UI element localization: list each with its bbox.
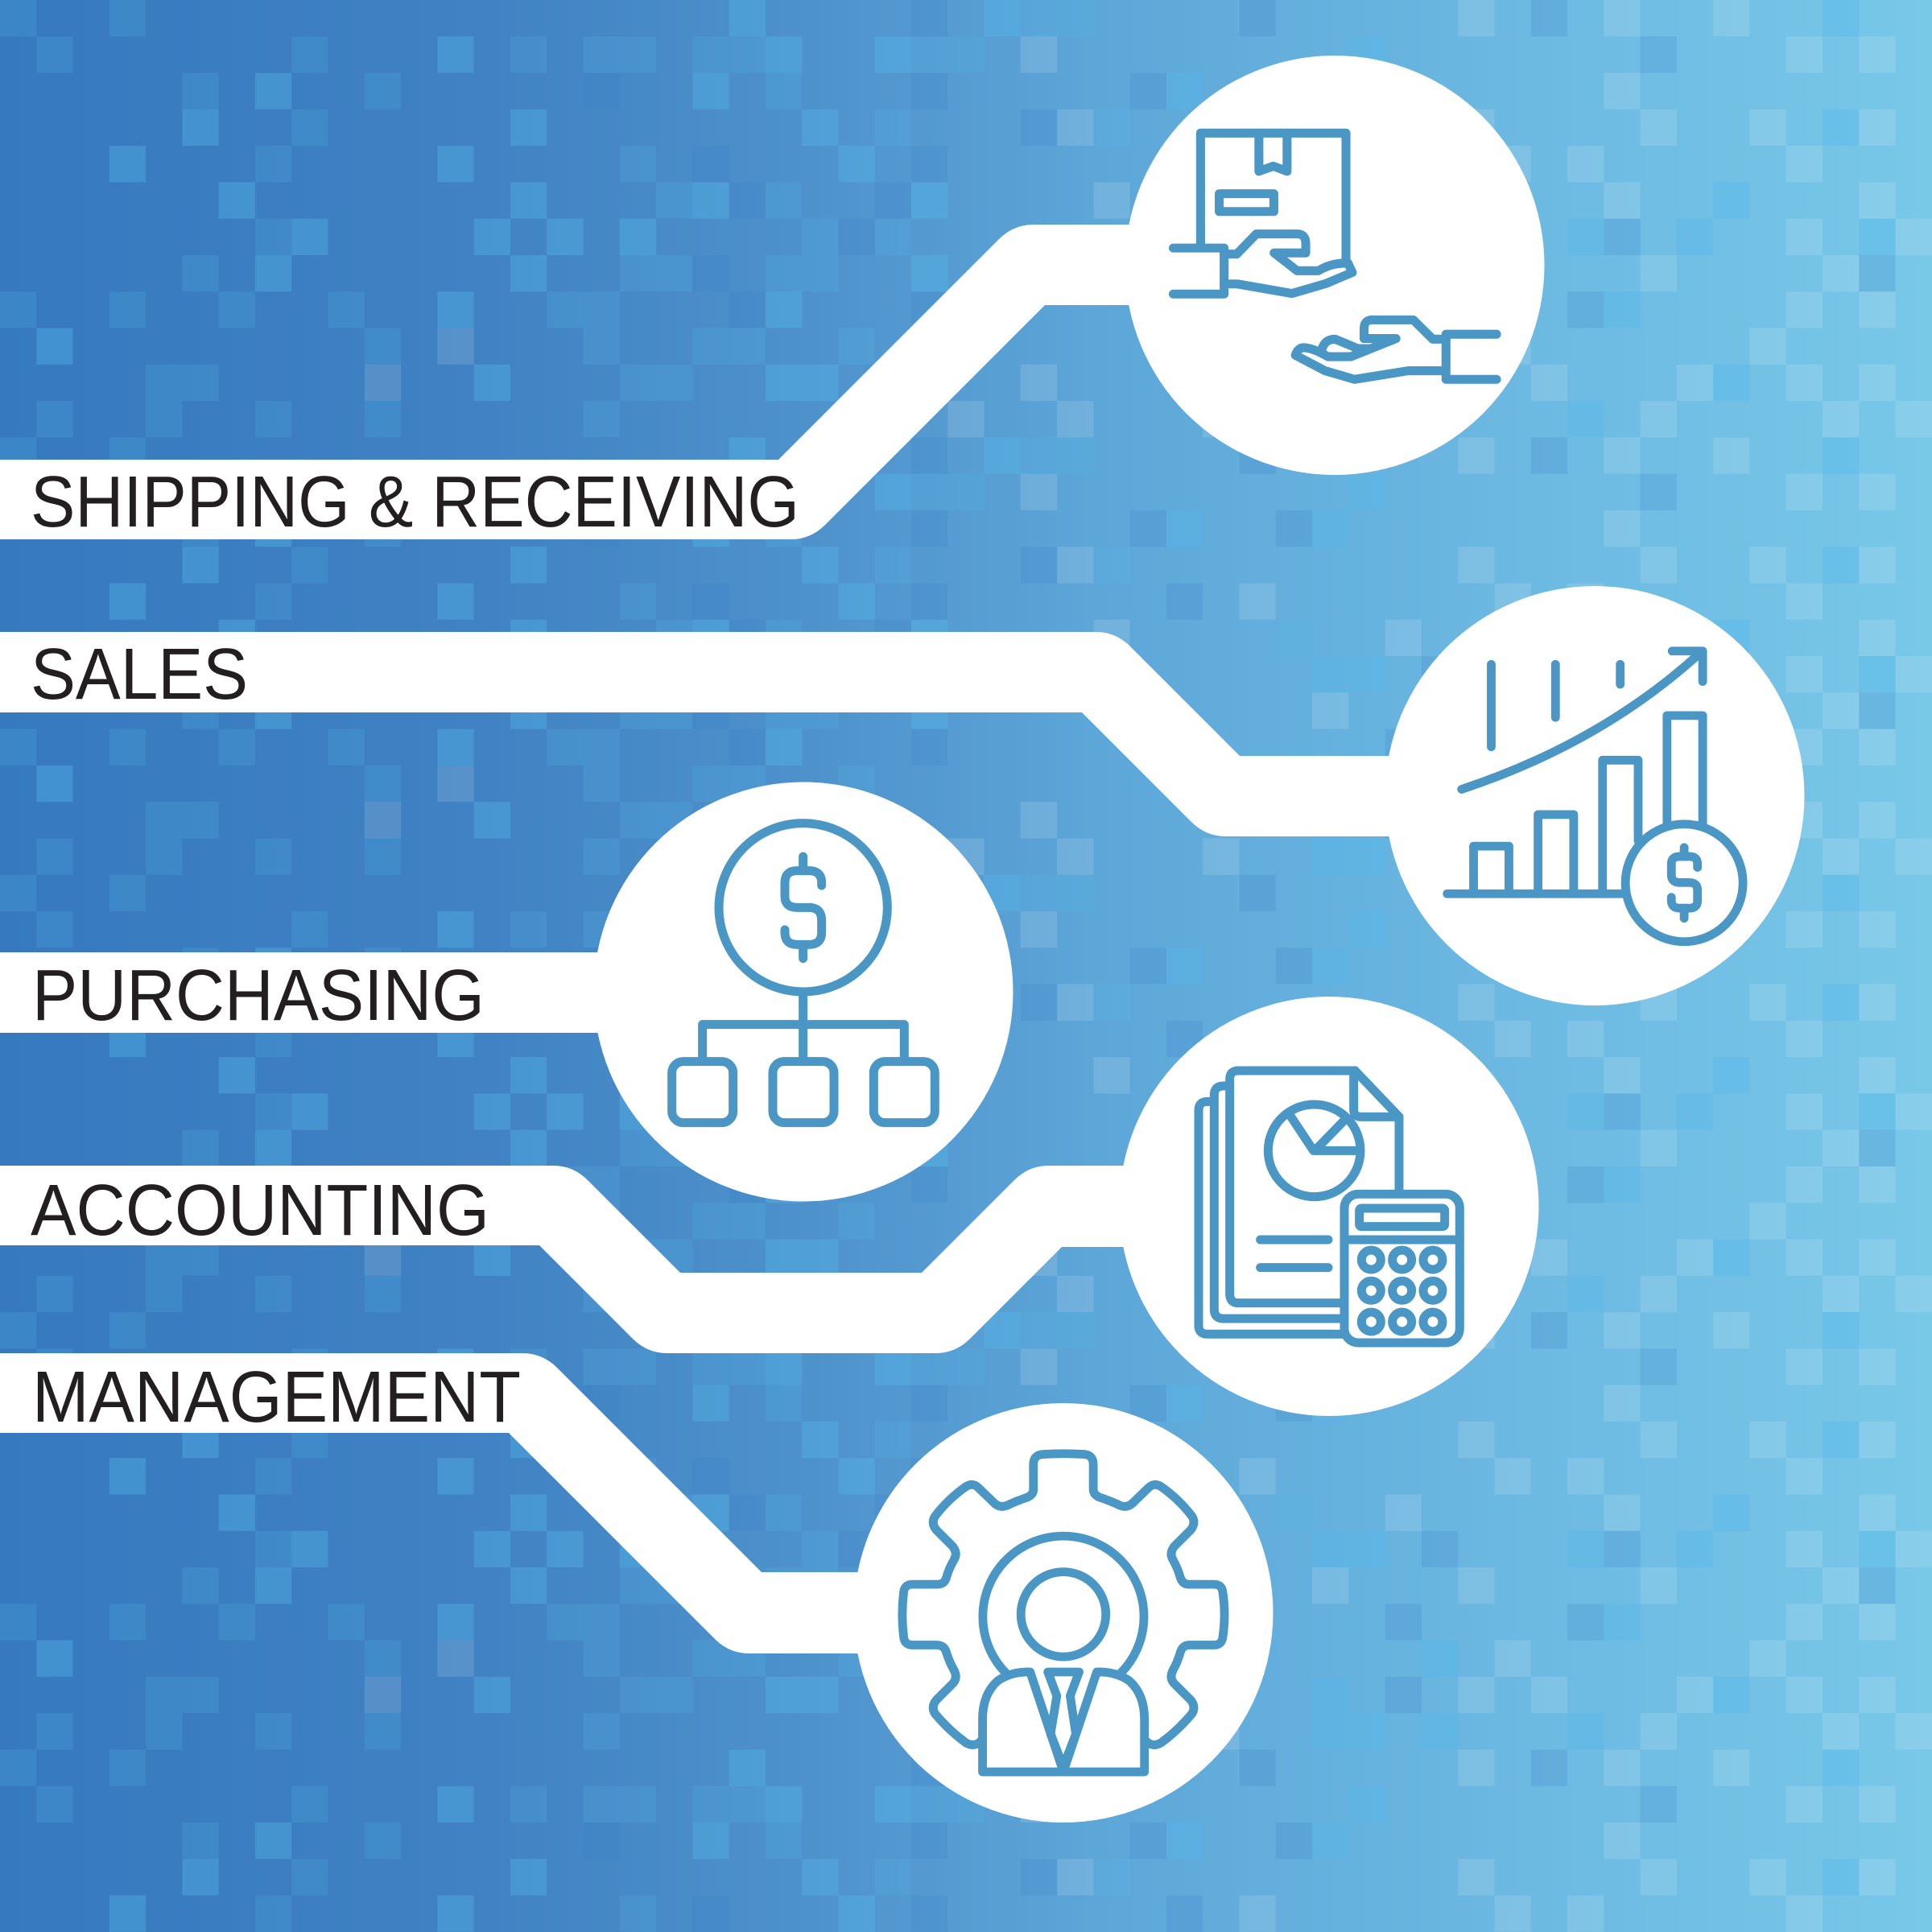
circle: sales [1385,586,1805,1005]
ribbon: accounting connector [0,1166,1208,1353]
label: purchasing: PURCHASING [32,956,485,1036]
icon: report pages with pie chart and calculator [1199,1071,1459,1343]
circle: purchasing [594,782,1013,1201]
circle: accounting [1119,997,1539,1416]
icon: sales growth chart with dollar coin [1447,651,1743,942]
icon: package passed between hands [1173,133,1496,379]
ribbon: management connector [0,1353,966,1653]
circle: shipping [1125,56,1544,475]
label: shipping and receiving: SHIPPING & RECEIVING [31,462,799,543]
circle: management [853,1403,1274,1823]
icon: dollar coin over organisation tree [672,824,935,1123]
label: accounting: ACCOUNTING [31,1170,489,1251]
ribbon: purchasing connector [0,952,644,1033]
label: management: MANAGEMENT [32,1357,521,1438]
label: sales: SALES [31,634,248,715]
icon: manager inside a gear [902,1454,1224,1772]
ribbon: sales connector [0,632,1449,836]
ribbon: shipping and receiving connector [0,225,1368,539]
